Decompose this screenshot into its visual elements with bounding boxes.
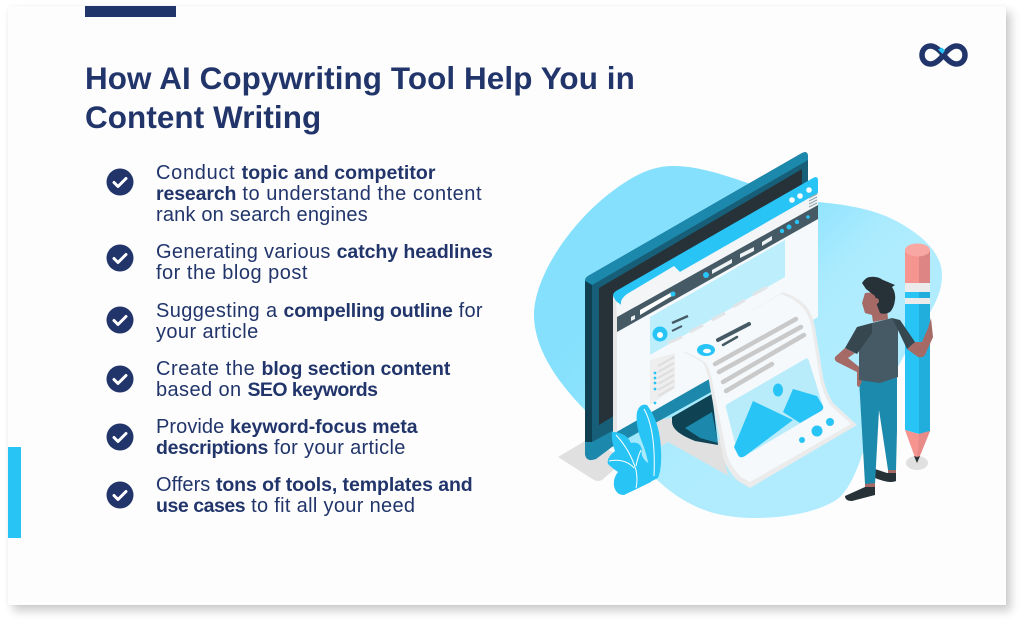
- round leaf: [608, 432, 652, 495]
- icon: check: [106, 366, 134, 392]
- text: descriptions for your article: [156, 437, 406, 459]
- text: [156, 416, 418, 459]
- arm on hip: [835, 348, 863, 387]
- heading: How AI Copywriting Tool Help You in: [85, 61, 635, 96]
- heading: Content Writing: [85, 100, 321, 135]
- monitor screen: [599, 169, 802, 425]
- arm holding pencil: [907, 318, 933, 357]
- neck and face: [862, 292, 888, 322]
- tall leaf: [637, 405, 661, 482]
- pencil tip: [905, 430, 930, 463]
- browser sidebar: [650, 353, 675, 405]
- back shoe: [875, 469, 896, 482]
- paper icons: [799, 418, 834, 443]
- icon: check: [106, 482, 134, 508]
- icon: check: [106, 244, 134, 272]
- toolbar icons: [670, 215, 810, 296]
- pencil: [905, 244, 930, 470]
- skin ankles: [865, 470, 896, 488]
- list item 1: [106, 162, 482, 226]
- front shoe: [845, 487, 875, 501]
- monitor side: [585, 281, 592, 442]
- text: [156, 300, 483, 343]
- text: based on SEO keywords: [156, 379, 377, 401]
- monitor stand: [672, 394, 718, 445]
- list item 2: [106, 241, 493, 284]
- browser window: [613, 177, 818, 434]
- pencil bands: [905, 283, 930, 292]
- paper avatar: [697, 344, 715, 356]
- text: Generating various catchy headlines: [156, 241, 493, 263]
- window buttons: [789, 187, 812, 203]
- list item 5: [106, 416, 418, 459]
- background blob: [534, 166, 942, 518]
- text: Suggesting a compelling outline for: [156, 300, 483, 322]
- icon: infinity logo: [919, 43, 968, 67]
- text: research to understand the content: [156, 183, 482, 205]
- text: [156, 474, 473, 517]
- browser toolbar: [617, 205, 818, 332]
- text: Offers tons of tools, templates and: [156, 474, 473, 496]
- text: rank on search engines: [156, 204, 368, 226]
- icon: check: [106, 168, 134, 196]
- legs: [859, 376, 897, 484]
- paper sheet: [683, 292, 857, 488]
- text: [156, 358, 450, 401]
- heading: [85, 61, 635, 135]
- paper edge: [683, 292, 857, 488]
- hair: [862, 277, 895, 314]
- monitor: [585, 152, 808, 460]
- address bar: [640, 292, 672, 315]
- browser page: [613, 178, 818, 434]
- browser avatar: [652, 326, 668, 342]
- monitor lower bezel: [585, 368, 722, 460]
- text: your article: [156, 321, 259, 343]
- top accent bar: [85, 6, 176, 17]
- icon: check: [106, 424, 134, 450]
- torso: [859, 318, 898, 383]
- pencil eraser: [905, 250, 930, 284]
- paper face: [683, 294, 851, 482]
- menu icon: [809, 194, 817, 207]
- ear: [873, 298, 879, 304]
- text: [156, 162, 482, 226]
- icon: check: [106, 306, 134, 334]
- paper heading lines: [718, 324, 749, 340]
- sleeves: [845, 318, 915, 354]
- list item 6: [106, 474, 473, 517]
- text: Conduct topic and competitor: [156, 162, 436, 184]
- pencil body: [905, 297, 930, 434]
- list item 4: [106, 358, 450, 401]
- text: for the blog post: [156, 262, 308, 284]
- image mountains: [734, 401, 793, 457]
- text: [156, 241, 493, 284]
- floor shadow: [558, 418, 750, 488]
- text: use cases to fit all your need: [156, 495, 415, 517]
- paper image: [726, 358, 823, 457]
- browser content lines: [668, 287, 767, 343]
- text: Provide keyword-focus meta: [156, 416, 418, 438]
- toolbar pills: [631, 236, 772, 321]
- browser hero panel: [650, 240, 785, 355]
- plant: [608, 405, 661, 495]
- browser title bar: [613, 177, 818, 305]
- paper text lines: [715, 319, 804, 391]
- pencil shadow: [906, 456, 928, 470]
- browser chrome and tab: [616, 193, 818, 318]
- person: [835, 277, 933, 501]
- monitor top edge: [585, 152, 808, 285]
- left accent bar: [8, 447, 21, 538]
- illustration: monitor, paper, person and pencil: [534, 152, 942, 518]
- list item 3: [106, 300, 483, 343]
- text: Create the blog section content: [156, 358, 450, 380]
- monitor back fill: [585, 152, 808, 460]
